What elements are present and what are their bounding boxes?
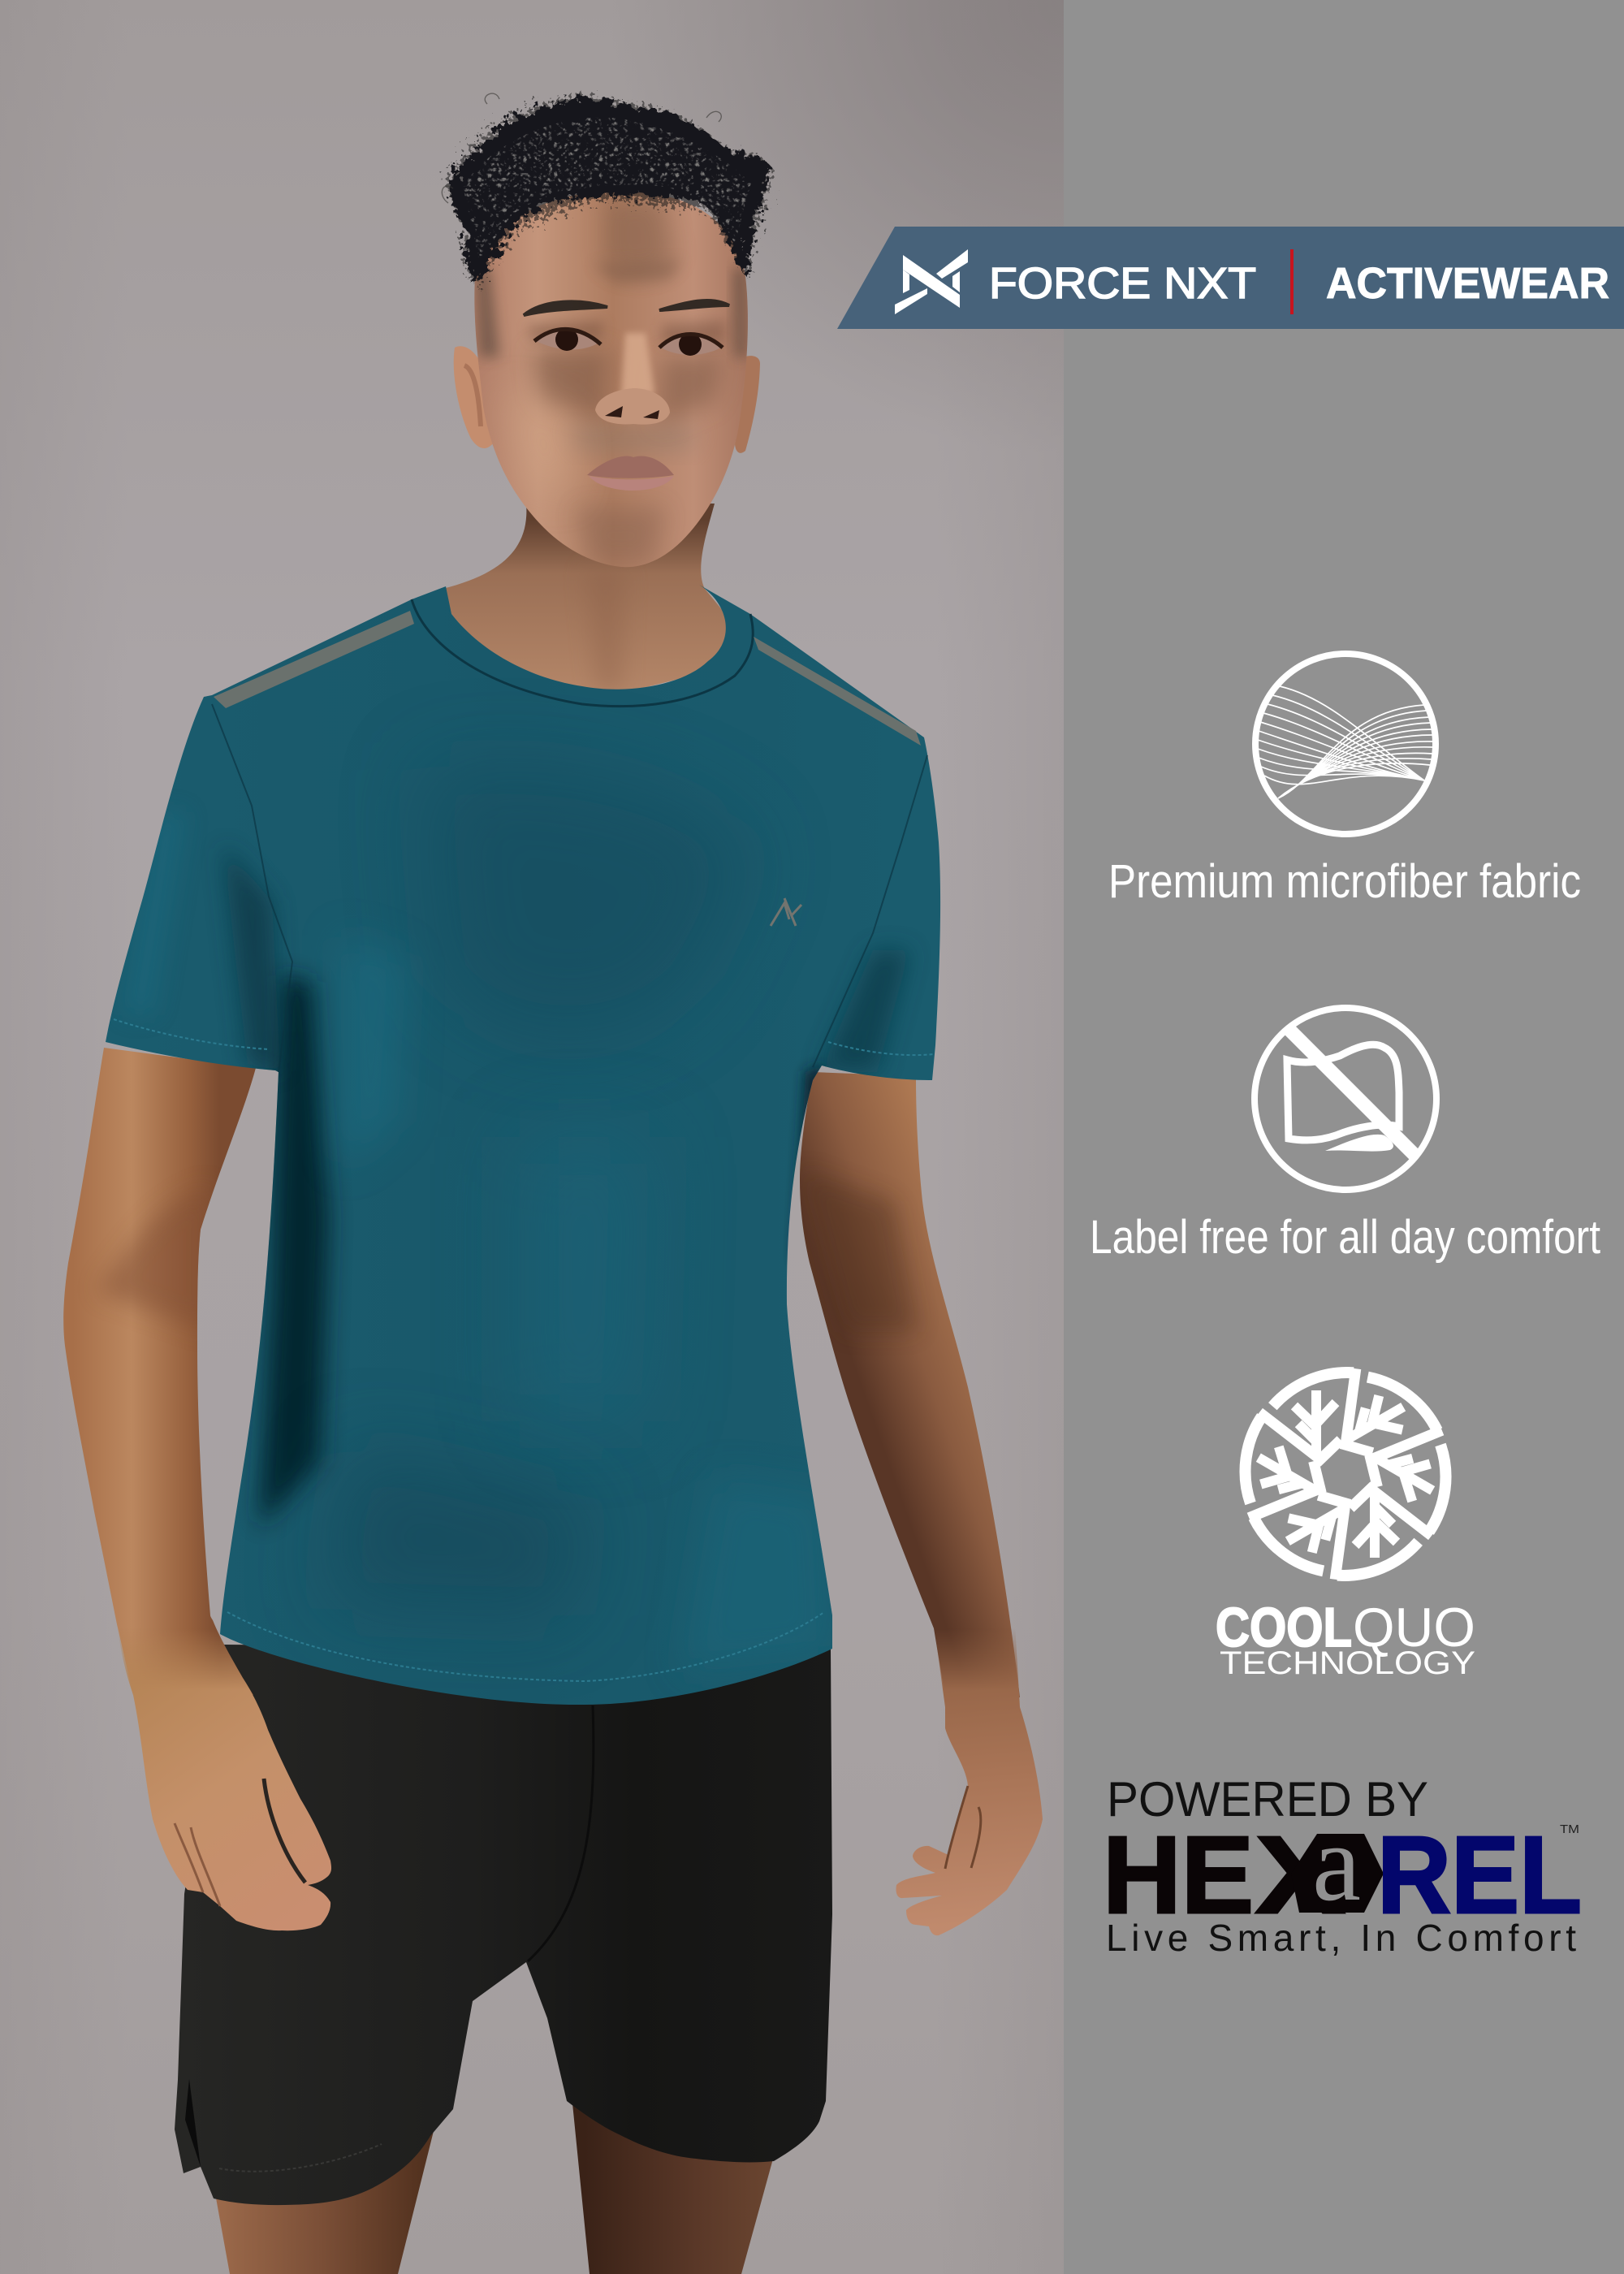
panel: grey feature column <box>1064 0 1624 2274</box>
mouth <box>587 456 674 491</box>
red divider <box>1290 249 1294 314</box>
feature: Coolquo technology <box>1216 1346 1475 1681</box>
right ear <box>735 356 760 453</box>
right sleeve seam <box>813 755 927 1067</box>
left leg <box>214 2128 434 2274</box>
icon: crossed-out garment label <box>1255 1008 1436 1190</box>
left hand <box>117 1620 331 1930</box>
brand banner <box>837 227 1624 329</box>
icon: snowflake wheel <box>1223 1346 1468 1602</box>
head <box>442 93 769 567</box>
shirt chest logo <box>771 898 801 926</box>
left sleeve seam <box>212 704 292 1072</box>
curly hair <box>442 93 769 284</box>
photo: male model <box>49 93 1043 2274</box>
banner background <box>837 227 1624 329</box>
Coolquo wordmark: TECHNOLOGY <box>1220 1645 1475 1681</box>
left reflective shoulder stripe <box>214 611 414 708</box>
shirt <box>106 585 940 1705</box>
Hexarel logo: X <box>1255 1814 1345 1936</box>
powered by Hexarel <box>1103 1772 1582 1959</box>
Hexarel logo: HE <box>1103 1814 1254 1936</box>
Hexarel logo <box>1103 1803 1582 1936</box>
left eyebrow <box>524 301 607 315</box>
left hand finger creases <box>175 1779 305 1906</box>
feature: label free <box>1090 1008 1600 1264</box>
right leg <box>572 2095 777 2274</box>
icon: woven fibre lines in circle <box>1255 654 1436 834</box>
Hexarel logo: TM <box>1560 1822 1579 1836</box>
right eye <box>659 333 723 356</box>
brand name: FORCE NXT <box>989 259 1256 308</box>
background: photo backdrop <box>0 0 1064 2274</box>
Coolquo wordmark: COOL <box>1216 1597 1352 1658</box>
left eye <box>534 328 601 351</box>
Coolquo wordmark: QUO <box>1353 1597 1475 1658</box>
Hexarel logo: a <box>1312 1803 1361 1924</box>
nose <box>595 388 670 425</box>
left ear inner <box>464 365 481 426</box>
right eyebrow <box>659 300 729 310</box>
right hand <box>896 1624 1043 1935</box>
Coolquo wordmark <box>1216 1597 1475 1681</box>
right arm <box>800 1072 1020 1697</box>
tagline: Live Smart, In Comfort <box>1106 1917 1576 1959</box>
category name: ACTIVEWEAR <box>1326 259 1609 308</box>
powered by heading: POWERED BY <box>1107 1772 1428 1827</box>
shorts <box>175 1645 832 2205</box>
neck <box>443 504 735 703</box>
face <box>474 191 748 567</box>
right hand thumb detail <box>945 1786 981 1869</box>
feature: microfiber fabric <box>1108 654 1581 908</box>
icon: Force NXT logo <box>895 249 968 314</box>
left ear <box>454 346 494 448</box>
Hexarel logo: REL <box>1377 1814 1582 1936</box>
left arm <box>63 1048 256 1695</box>
right reflective shoulder stripe <box>754 637 921 746</box>
collar seam <box>412 599 753 707</box>
sleeve hems and shirt hem stitches <box>114 1019 934 1681</box>
